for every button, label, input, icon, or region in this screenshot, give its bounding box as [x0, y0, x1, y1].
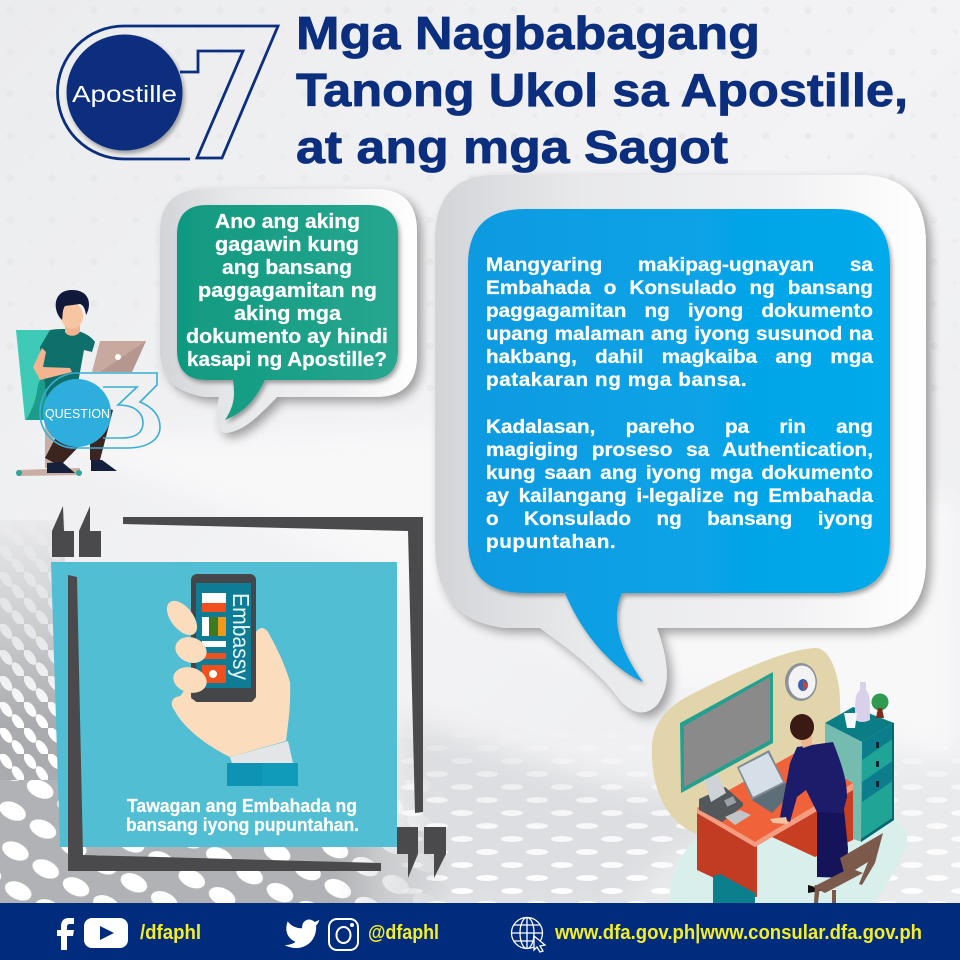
person with laptop — [16, 290, 146, 476]
title: Tanong Ukol sa Apostille, — [296, 64, 908, 116]
plant — [872, 694, 888, 710]
websites: www.dfa.gov.ph|www.consular.dfa.gov.ph — [554, 922, 922, 944]
caption — [126, 796, 359, 835]
answer text: o Konsulado ng bansang iyong — [486, 509, 873, 530]
question 3 badge — [40, 373, 160, 448]
printer — [699, 774, 751, 825]
question text: gagawin kung — [215, 234, 359, 256]
title: at ang mga Sagot — [296, 121, 728, 173]
bubble fill — [177, 205, 398, 420]
man — [770, 714, 848, 893]
laptop — [737, 750, 797, 813]
answer text: patakaran ng mga bansa. — [486, 370, 747, 391]
torso — [40, 329, 95, 400]
panel: question bubble — [160, 189, 417, 433]
background — [0, 423, 960, 903]
opening quote — [52, 506, 101, 557]
frame bottom left — [68, 575, 381, 871]
logo: Apostille 7 — [58, 26, 278, 159]
wall blob — [652, 648, 842, 835]
answer fill — [468, 209, 890, 682]
head — [65, 322, 80, 336]
answer text: ay kailangang i-legalize ng Embahada — [486, 486, 873, 507]
facebook handle: /dfaphl — [140, 922, 201, 944]
answer text: Kadalasan, pareho pa rin ang — [486, 417, 873, 438]
badge circle — [43, 379, 111, 447]
caption: Tawagan ang Embahada ng — [127, 796, 357, 816]
sleeve — [227, 763, 298, 786]
answer text: Embahada o Konsulado ng bansang — [486, 278, 873, 299]
bubble rim — [160, 189, 417, 433]
footer bar — [0, 903, 960, 960]
legs — [45, 400, 113, 466]
desk — [697, 752, 853, 897]
teal card — [51, 562, 397, 847]
palm — [173, 628, 290, 757]
badge label: QUESTION — [45, 406, 110, 421]
icon: youtube — [84, 918, 128, 948]
phone label: Embassy — [228, 593, 254, 680]
bottle — [855, 682, 870, 722]
screen — [680, 672, 773, 793]
question text — [186, 211, 388, 371]
question text: Ano ang aking — [215, 211, 360, 233]
panel: answer bubble — [435, 175, 926, 712]
chair — [16, 330, 70, 420]
chair — [813, 833, 883, 903]
panel: call the embassy — [51, 506, 446, 878]
logo circle — [66, 34, 182, 150]
briefcase — [713, 874, 755, 903]
office worker illustration — [652, 648, 907, 903]
icon: facebook — [57, 918, 74, 950]
answer rim — [435, 175, 926, 712]
question text: ang bansang — [222, 257, 352, 279]
fingers — [161, 595, 203, 641]
icon: instagram — [329, 919, 358, 950]
seal — [785, 663, 817, 701]
caption: bansang iyong pupuntahan. — [126, 815, 359, 835]
answer text: magiging proseso sa Authentication, — [486, 440, 873, 461]
icon: globe — [512, 918, 545, 952]
cabinet — [825, 682, 894, 842]
cup — [844, 713, 857, 728]
question text: paggagamitan ng — [198, 280, 377, 302]
twitter handle: @dfaphl — [368, 922, 439, 944]
question text: aking mga — [234, 303, 342, 325]
answer text: kung saan ang iyong mga dokumento — [486, 463, 873, 484]
answer text: pupuntahan. — [486, 532, 616, 553]
icon: hand holding phone — [161, 574, 298, 786]
title — [296, 7, 908, 173]
icon: twitter — [285, 919, 319, 948]
answer text: paggagamitan ng iyong dokumento — [486, 301, 873, 322]
question text: kasapi ng Apostille? — [187, 349, 387, 371]
laptop — [92, 341, 146, 372]
floor — [670, 800, 907, 903]
closing quote — [397, 827, 446, 878]
logo label: Apostille — [72, 81, 177, 107]
answer text: hakbang, dahil magkaiba ang mga — [486, 347, 873, 368]
phone — [191, 574, 256, 702]
answer text — [486, 255, 874, 553]
answer text: upang malaman ang iyong susunod na — [486, 324, 873, 345]
title: Mga Nagbabagang — [296, 7, 760, 59]
frame top right — [123, 517, 423, 813]
question text: dokumento ay hindi — [186, 326, 388, 348]
answer text: Mangyaring makipag-ugnayan sa — [486, 255, 873, 276]
